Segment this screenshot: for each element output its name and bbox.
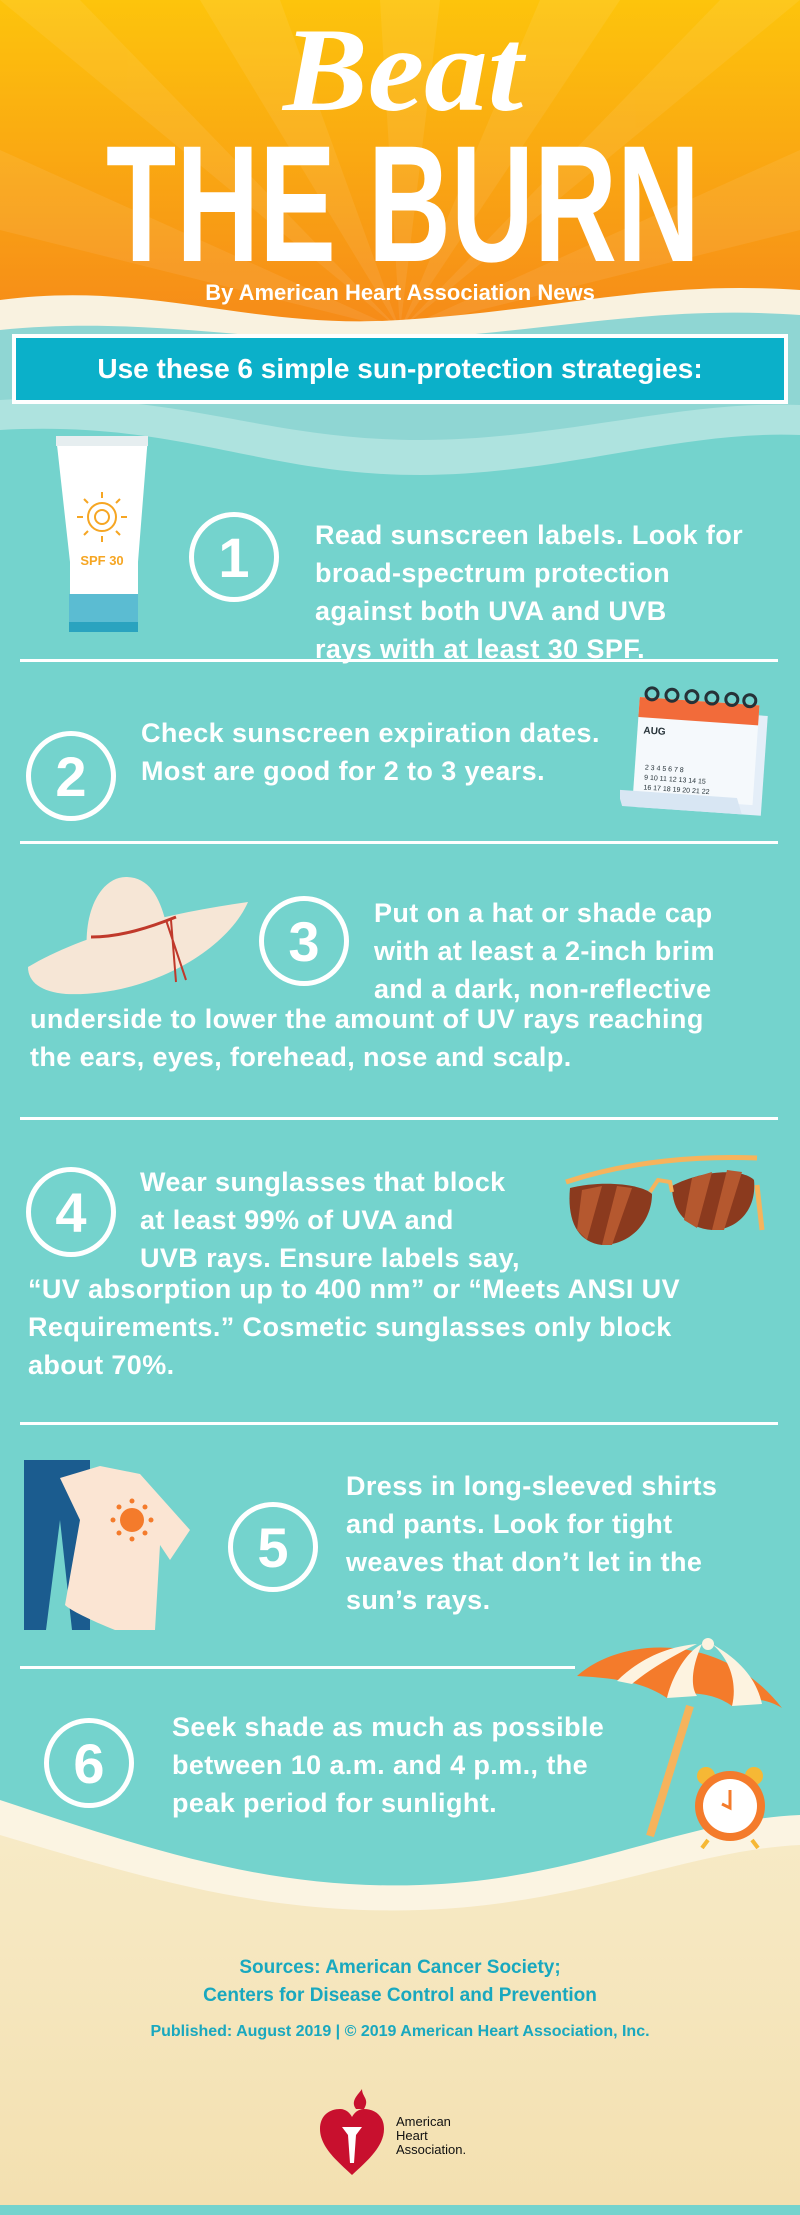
text 3 continued: underside to lower the amount of UV rays reaching (30, 1004, 704, 1034)
icon: calendar: 16 17 18 19 20 21 22 (643, 784, 710, 796)
icon: sunscreen tube: SPF 30 (80, 553, 124, 568)
number 3: 3 (288, 910, 320, 972)
logo: American Heart Association: Association. (396, 2142, 466, 2157)
icon: calendar: 9 10 11 12 13 14 15 (644, 775, 706, 786)
text 4 continued: Requirements.” Cosmetic sunglasses only block (28, 1312, 672, 1342)
logo: American Heart Association (320, 2089, 466, 2175)
text 4: at least 99% of UVA and (140, 1205, 454, 1235)
text 5 (346, 1471, 717, 1615)
number 4: 4 (55, 1180, 87, 1244)
text 1: against both UVA and UVB (315, 596, 667, 626)
text 2: Most are good for 2 to 3 years. (141, 756, 545, 786)
icon: sun hat (28, 877, 248, 994)
number 2 (26, 731, 116, 821)
icon: calendar: AUG (643, 725, 666, 738)
text 4: Wear sunglasses that block (140, 1167, 506, 1197)
icon: sunglasses (565, 1155, 764, 1245)
number 4 (26, 1167, 116, 1257)
text 3: and a dark, non-reflective (374, 974, 712, 1004)
text 6: Seek shade as much as possible (172, 1712, 604, 1742)
number 6: 6 (73, 1732, 105, 1794)
text 3: Put on a hat or shade cap (374, 898, 713, 928)
logo: American Heart Association: Heart (396, 2128, 428, 2143)
text 4: UVB rays. Ensure labels say, (140, 1243, 520, 1273)
sources (203, 1957, 597, 2006)
banner (12, 334, 788, 404)
text 1 (315, 520, 743, 664)
number 5: 5 (257, 1516, 289, 1578)
text 5: and pants. Look for tight (346, 1509, 672, 1539)
logo: American Heart Association: American (396, 2114, 451, 2129)
text 4 continued: about 70%. (28, 1350, 175, 1380)
text 3 continued (30, 1004, 704, 1072)
sources: Sources: American Cancer Society; (239, 1957, 561, 1978)
number 1 (189, 512, 279, 602)
sources: Centers for Disease Control and Prevention (203, 1985, 597, 2006)
text 3 continued: the ears, eyes, forehead, nose and scalp. (30, 1042, 572, 1072)
icon: beach umbrella (577, 1638, 782, 1838)
icon: shirt and pants (24, 1460, 190, 1630)
text 6: between 10 a.m. and 4 p.m., the (172, 1750, 588, 1780)
icon: calendar: 2 3 4 5 6 7 8 (645, 765, 684, 774)
text 2: Check sunscreen expiration dates. (141, 718, 600, 748)
text 1: rays with at least 30 SPF. (315, 634, 645, 664)
text 6 (172, 1712, 604, 1818)
text 1: broad-spectrum protection (315, 558, 670, 588)
text 5: weaves that don’t let in the (346, 1547, 702, 1577)
number 5 (228, 1502, 318, 1592)
number 2: 2 (55, 744, 87, 808)
text 3 (374, 898, 715, 1004)
banner: Use these 6 simple sun-protection strategies: (97, 353, 703, 384)
text 6: peak period for sunlight. (172, 1788, 497, 1818)
number 1: 1 (218, 526, 250, 588)
icon: calendar (620, 686, 768, 816)
text 2 (141, 718, 600, 786)
text 4 continued (28, 1274, 680, 1380)
number 3 (259, 896, 349, 986)
text 4 (140, 1167, 520, 1273)
title (106, 3, 700, 270)
icon: alarm clock (695, 1767, 765, 1849)
text 4 continued: “UV absorption up to 400 nm” or “Meets ANSI UV (28, 1274, 680, 1304)
published line: Published: August 2019 | © 2019 American Heart Association, Inc. (150, 2023, 650, 2040)
number 6 (44, 1718, 134, 1808)
text 5: Dress in long-sleeved shirts (346, 1471, 717, 1501)
title: Beat (281, 3, 527, 136)
text 3: with at least a 2-inch brim (374, 936, 715, 966)
subtitle: By American Heart Association News (205, 280, 595, 305)
text 1: Read sunscreen labels. Look for (315, 520, 743, 550)
icon: sunscreen tube (56, 436, 148, 632)
text 5: sun’s rays. (346, 1585, 490, 1615)
